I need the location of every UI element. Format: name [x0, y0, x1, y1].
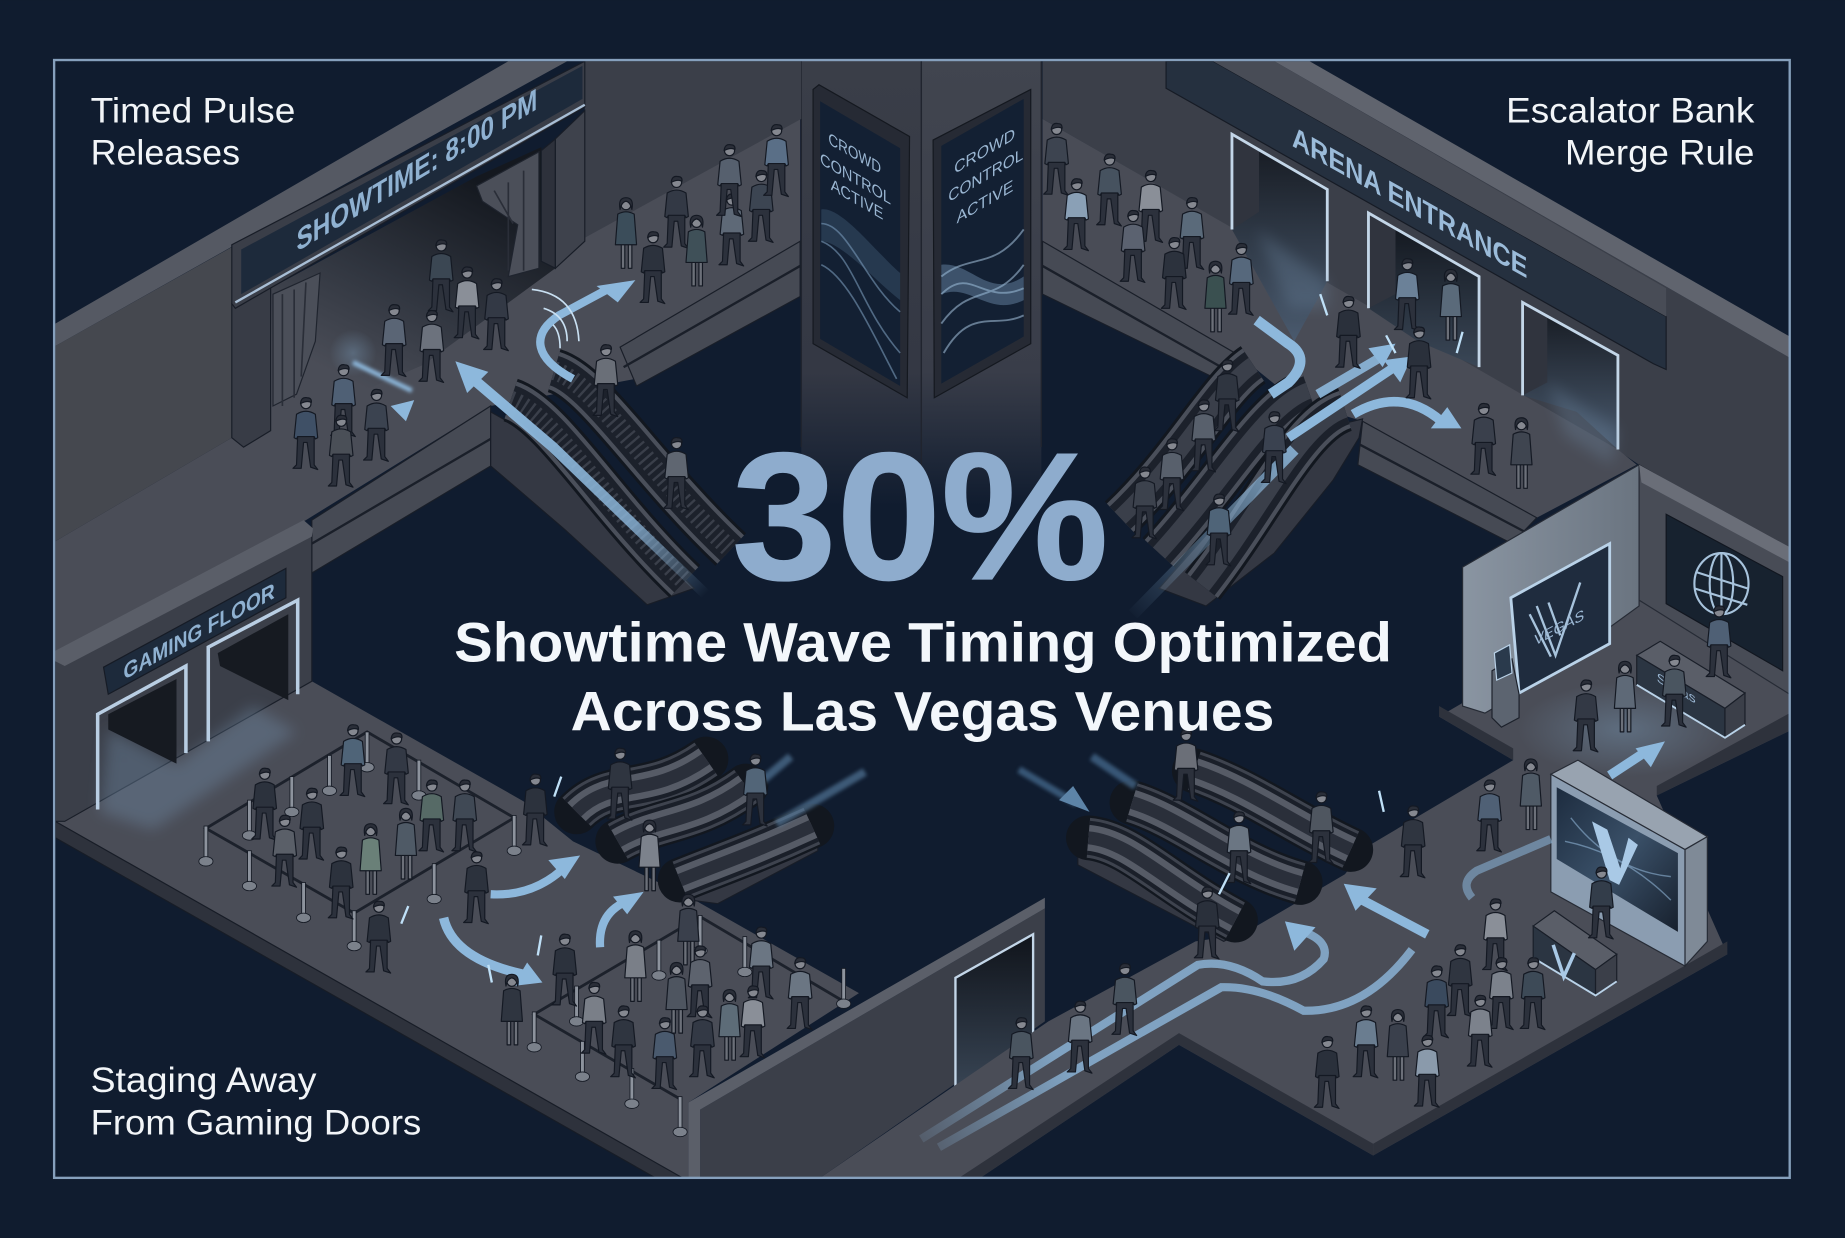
sign: showtime: SHOWTIME: 8:00 PM: [297, 82, 537, 259]
title text: Showtime Wave Timing Optimized: [454, 611, 1392, 673]
arrows: lobby: [921, 741, 1665, 1147]
escalators: bottom right bank: [1078, 771, 1351, 941]
label: staging away: Staging Away: [91, 1061, 317, 1100]
people: lobby corridor: [1008, 606, 1731, 1090]
sign: showtime: [232, 61, 585, 308]
arrow: small room arrow: [329, 329, 414, 421]
desk: kiosk reception: [1637, 641, 1745, 738]
wall cap: [1274, 61, 1790, 358]
screen: left crowd control: [813, 85, 910, 398]
title text: [454, 611, 1392, 743]
label: escalator bank: Merge Rule: [1565, 134, 1754, 173]
icon: globe: [1694, 553, 1749, 614]
panel: central pillars with screens: [801, 60, 1041, 507]
arrow: escalator to showtime: [455, 361, 718, 606]
desk: V desk: [1533, 911, 1617, 995]
arrows: showtime pulse: [329, 280, 718, 606]
wall: kiosk left panel: [1463, 465, 1639, 713]
room interior: [271, 147, 555, 431]
arrow: S curve: [532, 280, 635, 379]
fascia: lobby edges: [959, 706, 1790, 1178]
label: timed pulse: Timed Pulse: [91, 91, 295, 130]
fascia: showtime ledge: [312, 241, 800, 573]
screen: right crowd control: [933, 89, 1031, 398]
people: gaming queue 1: [252, 725, 767, 1045]
wall: back wall right of door: [585, 61, 801, 238]
doors: gaming: [98, 600, 298, 830]
label: escalator bank: [1506, 91, 1755, 173]
wall: front wall face: [700, 908, 1045, 1178]
wall: front wall cap: [688, 898, 1045, 1178]
desk: kiosk reception: S Gas: [1657, 669, 1696, 707]
floor: gaming floor: [55, 681, 859, 1178]
floor: showtime corridor: [55, 119, 800, 659]
label: escalator bank: Escalator Bank: [1506, 91, 1755, 130]
arrows: gaming floor: [444, 757, 865, 986]
arrows: arena merge: [1133, 320, 1461, 614]
panel: gaming floor (left): [55, 520, 859, 1178]
screen: right crowd control: CROWD: [954, 125, 1015, 178]
icon: ticket machine: [1492, 645, 1519, 727]
sign: arena entrance: [1166, 61, 1666, 369]
wall: kiosk right panel: [1639, 465, 1790, 694]
fascia: gaming ledge: [55, 821, 682, 1178]
wall: gaming hall: [55, 520, 313, 821]
stat: 30%: 30%: [732, 416, 1108, 618]
panel: lower wall with door: [688, 898, 1045, 1178]
panel: showtime corridor (top left): [55, 61, 801, 659]
label: timed pulse: [91, 91, 295, 173]
kiosk screen: V display: [1551, 760, 1707, 966]
escalators: top left bank: [491, 371, 731, 605]
wall: left wall and cap: [55, 61, 567, 541]
screen: left crowd control: ACTIVE: [831, 175, 883, 224]
people: showtime corridor: [593, 125, 788, 510]
screen: left crowd control: CONTROL: [820, 150, 891, 209]
screen: left crowd control: CROWD: [828, 130, 881, 178]
escalators: top right bank: [1120, 365, 1363, 606]
screen: right crowd control: CONTROL: [948, 145, 1023, 206]
panel: arena entrance (top right): [1043, 61, 1790, 553]
screen: right crowd control: ACTIVE: [957, 177, 1013, 228]
people: lobby crowd: [1314, 867, 1613, 1108]
wall: arena back wall: [1043, 61, 1790, 553]
title: headline stat and text: [454, 416, 1392, 743]
label: staging away: [91, 1061, 421, 1142]
label: staging away: From Gaming Doors: [91, 1103, 421, 1142]
curtains: [273, 152, 539, 406]
floor: arena corridor: [1043, 119, 1637, 518]
stanchion rope: gaming group 1: [199, 732, 521, 951]
people: showtime room: [293, 240, 508, 487]
people: gaming queue 2: [581, 894, 812, 1090]
door: lower door: [955, 934, 1033, 1098]
sign: gaming floor: GAMING FLOOR: [124, 578, 275, 685]
label: timed pulse: Releases: [91, 134, 240, 173]
light wands: [401, 294, 1463, 983]
sign: arena entrance: ARENA ENTRANCE: [1292, 120, 1527, 286]
people: arena corridor: [1044, 123, 1532, 566]
panel: vegas kiosk (right): [1463, 465, 1790, 738]
icon: V logo: [1592, 821, 1638, 885]
fascia: arena ledge: [1043, 241, 1537, 544]
floor: lobby: [820, 600, 1790, 1178]
panel: lobby floor (bottom right): [820, 600, 1790, 1178]
doors: arena: [1232, 134, 1618, 465]
door pillars: [232, 111, 585, 447]
stanchion rope: gaming group 2: [527, 915, 851, 1137]
wall: kiosk left panel: VEGAS: [1534, 606, 1584, 650]
escalators: bottom left bank: [577, 759, 818, 904]
title text: Across Las Vegas Venues: [571, 681, 1274, 743]
